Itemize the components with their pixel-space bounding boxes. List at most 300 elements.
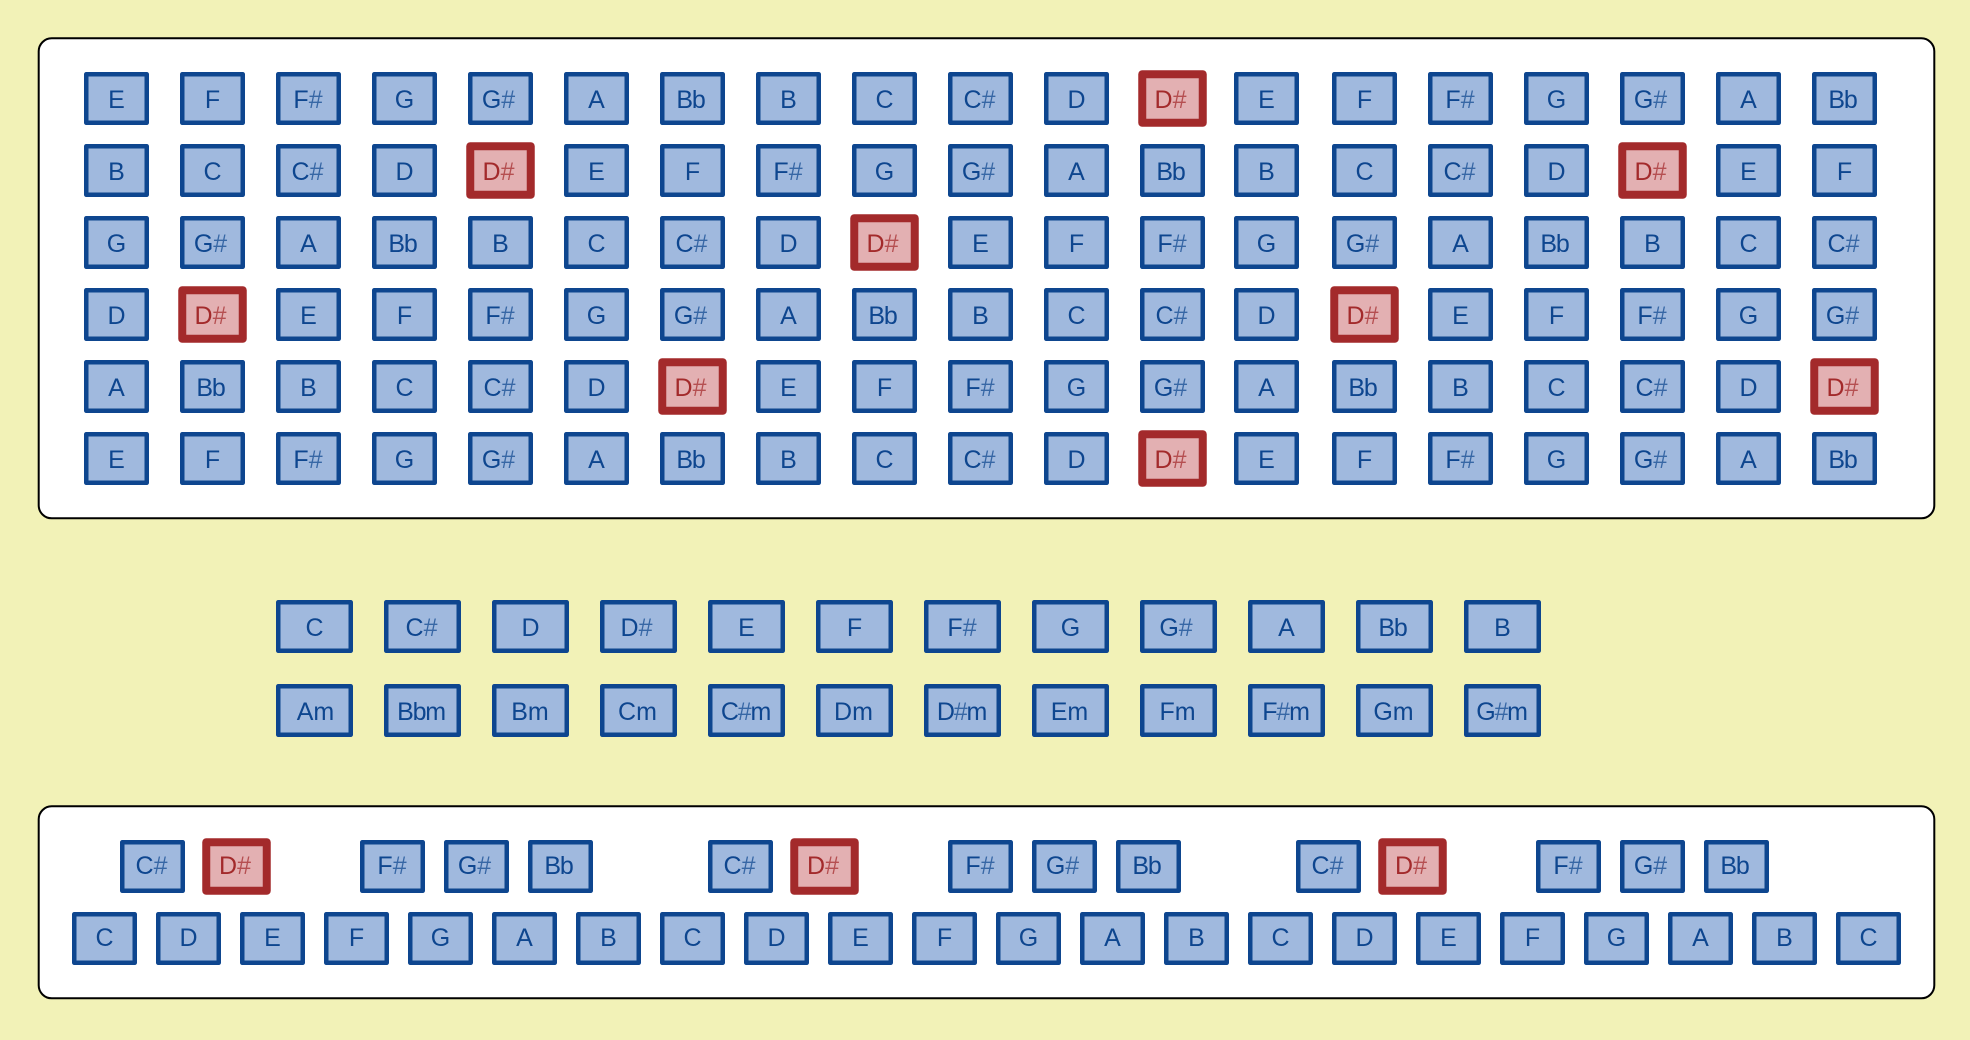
- key: E: E: [1740, 158, 1757, 186]
- key: Bb: [1814, 74, 1875, 123]
- key: D: D: [1257, 302, 1276, 330]
- key: F: F: [1357, 446, 1372, 474]
- highlighted key: D#: [794, 842, 855, 891]
- key: A: [1430, 218, 1491, 267]
- key: B: B: [1258, 158, 1275, 186]
- key: D: D: [1067, 446, 1086, 474]
- chord: Dm: [818, 686, 891, 735]
- highlighted key: D#: D#: [867, 230, 899, 258]
- key: G: [998, 914, 1059, 963]
- key: F#: [278, 434, 339, 483]
- key: E: [86, 434, 147, 483]
- key: E: E: [108, 86, 125, 114]
- key: D: [758, 218, 819, 267]
- key: F#: F#: [1445, 446, 1475, 474]
- key: F: [326, 914, 387, 963]
- key: G: G: [1067, 374, 1086, 402]
- key: E: [1236, 74, 1297, 123]
- key: C#: [950, 434, 1011, 483]
- key: G#: [470, 434, 531, 483]
- key: C#: C#: [1312, 852, 1344, 880]
- key: F#: [1430, 74, 1491, 123]
- key: C#: C#: [1636, 374, 1668, 402]
- key: G: G: [1019, 924, 1038, 952]
- chord: Dm: Dm: [834, 698, 873, 726]
- key: Bb: [1118, 842, 1179, 891]
- key: D: D: [1067, 86, 1086, 114]
- key: F: [662, 146, 723, 195]
- key: B: B: [972, 302, 989, 330]
- highlighted key: D#: [854, 218, 915, 267]
- key: C#: [1142, 290, 1203, 339]
- key: Bb: Bb: [1828, 446, 1857, 474]
- chord: D#m: D#m: [937, 698, 986, 726]
- key: A: [1082, 914, 1143, 963]
- key: A: A: [1452, 230, 1469, 258]
- chord: G: G: [1061, 614, 1080, 642]
- key: G: G: [1547, 446, 1566, 474]
- key: E: E: [1258, 446, 1275, 474]
- key: B: B: [1644, 230, 1661, 258]
- key: C#: [278, 146, 339, 195]
- key: A: [86, 362, 147, 411]
- key: D: D: [587, 374, 606, 402]
- key: C#: C#: [964, 446, 996, 474]
- chord: B: [1466, 602, 1539, 651]
- key: C#: [122, 842, 183, 891]
- key: Bb: Bb: [544, 852, 573, 880]
- key: E: [566, 146, 627, 195]
- key: F#: F#: [485, 302, 515, 330]
- grid row 6: [86, 434, 1875, 483]
- key: G: [1526, 434, 1587, 483]
- key: F: F: [937, 924, 952, 952]
- key: C: C: [683, 924, 702, 952]
- key: E: [758, 362, 819, 411]
- key: B: [86, 146, 147, 195]
- key: C: C: [95, 924, 114, 952]
- chord: Bbm: Bbm: [397, 698, 445, 726]
- chord: C: [278, 602, 351, 651]
- chord: D: [494, 602, 567, 651]
- key: C: C: [587, 230, 606, 258]
- key: C#: C#: [136, 852, 168, 880]
- grid row 5: [86, 362, 1875, 411]
- key: F#: F#: [1157, 230, 1187, 258]
- key: C: C: [875, 86, 894, 114]
- highlighted key: D#: D#: [1827, 374, 1859, 402]
- key: F: [1526, 290, 1587, 339]
- key: G#: G#: [482, 446, 515, 474]
- key: C#: [950, 74, 1011, 123]
- key: C: [1046, 290, 1107, 339]
- key: A: [566, 434, 627, 483]
- highlighted key: D#: D#: [483, 158, 515, 186]
- key: C: [854, 434, 915, 483]
- key: A: A: [300, 230, 317, 258]
- key: A: A: [1104, 924, 1121, 952]
- key: A: [1046, 146, 1107, 195]
- chord: D: D: [521, 614, 540, 642]
- key: E: E: [108, 446, 125, 474]
- key: G#: G#: [194, 230, 227, 258]
- chord: E: E: [738, 614, 755, 642]
- panel: chord selectors: [278, 602, 1539, 735]
- key: G: [1718, 290, 1779, 339]
- key: B: [470, 218, 531, 267]
- key: F#: F#: [293, 446, 323, 474]
- key: G#: [950, 146, 1011, 195]
- key: B: B: [1452, 374, 1469, 402]
- key: B: B: [1776, 924, 1793, 952]
- chord: Am: [278, 686, 351, 735]
- key: F#: F#: [965, 374, 995, 402]
- key: F: [1334, 74, 1395, 123]
- key: G: [1046, 362, 1107, 411]
- key: D: [158, 914, 219, 963]
- key: D: [1046, 434, 1107, 483]
- key: F#: [950, 362, 1011, 411]
- highlighted key: D#: [662, 362, 723, 411]
- key: G: G: [431, 924, 450, 952]
- key: B: [758, 74, 819, 123]
- key: E: E: [300, 302, 317, 330]
- key: D: D: [179, 924, 198, 952]
- key: G: G: [1607, 924, 1626, 952]
- key: F#: F#: [293, 86, 323, 114]
- highlighted key: D#: D#: [1347, 302, 1379, 330]
- key: F: F: [205, 446, 220, 474]
- key: G: G: [1547, 86, 1566, 114]
- panel: note grid: [39, 38, 1934, 518]
- key: B: [758, 434, 819, 483]
- key: F: [374, 290, 435, 339]
- key: B: [1166, 914, 1227, 963]
- key: Bb: [854, 290, 915, 339]
- key: F: F: [1549, 302, 1564, 330]
- key: A: A: [1068, 158, 1085, 186]
- key: C#: C#: [1828, 230, 1860, 258]
- chord: Em: [1034, 686, 1107, 735]
- key: G#: G#: [962, 158, 995, 186]
- key: A: A: [108, 374, 125, 402]
- key: Bb: [662, 74, 723, 123]
- key: Bb: Bb: [676, 446, 705, 474]
- key: F#: [758, 146, 819, 195]
- key: C#: C#: [484, 374, 516, 402]
- key: A: [758, 290, 819, 339]
- key: B: [950, 290, 1011, 339]
- key: F#: F#: [965, 852, 995, 880]
- chord: Bm: Bm: [511, 698, 549, 726]
- highlighted key: D#: [182, 290, 243, 339]
- chord: C: C: [305, 614, 324, 642]
- key: D: D: [1355, 924, 1374, 952]
- key: G: [854, 146, 915, 195]
- key: G#: G#: [458, 852, 491, 880]
- key: Bb: Bb: [1132, 852, 1161, 880]
- chord: G#: G#: [1159, 614, 1193, 642]
- key: C#: C#: [1156, 302, 1188, 330]
- chord: Bbm: [386, 686, 459, 735]
- key: D: D: [767, 924, 786, 952]
- key: C: C: [203, 158, 222, 186]
- key: G#: [446, 842, 507, 891]
- key: G: G: [107, 230, 126, 258]
- key: D: D: [779, 230, 798, 258]
- key: G#: G#: [1346, 230, 1379, 258]
- key: A: [1670, 914, 1731, 963]
- highlighted key: D#: [1334, 290, 1395, 339]
- key: B: [1754, 914, 1815, 963]
- key: A: A: [1740, 86, 1757, 114]
- chord: G#m: [1466, 686, 1539, 735]
- key: B: B: [300, 374, 317, 402]
- chord: Bb: Bb: [1378, 614, 1407, 642]
- key: A: A: [1740, 446, 1757, 474]
- key: Bb: Bb: [388, 230, 417, 258]
- key: F: F: [877, 374, 892, 402]
- key: D: [1236, 290, 1297, 339]
- grid row 1: [86, 74, 1875, 123]
- key: G#: [182, 218, 243, 267]
- key: C: [854, 74, 915, 123]
- chord: Cm: [602, 686, 675, 735]
- key: G#: [1622, 434, 1683, 483]
- key: B: B: [600, 924, 617, 952]
- key: G#: G#: [1826, 302, 1859, 330]
- chord: Fm: Fm: [1159, 698, 1196, 726]
- key: G#: G#: [1634, 852, 1667, 880]
- key: G#: G#: [1046, 852, 1079, 880]
- key: Bb: Bb: [676, 86, 705, 114]
- key: G: G: [395, 446, 414, 474]
- highlighted key: D#: D#: [807, 852, 839, 880]
- key: C: C: [1355, 158, 1374, 186]
- key: A: [1718, 434, 1779, 483]
- key: F#: [278, 74, 339, 123]
- key: G#: G#: [482, 86, 515, 114]
- chord: Bb: [1358, 602, 1431, 651]
- key: F: F: [1525, 924, 1540, 952]
- key: G: G: [587, 302, 606, 330]
- chord: Fm: [1142, 686, 1215, 735]
- key: C: C: [875, 446, 894, 474]
- key: F#: [470, 290, 531, 339]
- chord: Cm: Cm: [618, 698, 657, 726]
- key: E: [950, 218, 1011, 267]
- key: Bb: [530, 842, 591, 891]
- highlighted key: D#: D#: [1155, 86, 1187, 114]
- highlighted key: D#: [1142, 434, 1203, 483]
- key: F: [182, 74, 243, 123]
- key: Bb: Bb: [868, 302, 897, 330]
- key: F: [1502, 914, 1563, 963]
- key: B: [1622, 218, 1683, 267]
- key: G#: [1622, 842, 1683, 891]
- key: C: [74, 914, 135, 963]
- key: C: C: [1739, 230, 1758, 258]
- key: Bb: [1334, 362, 1395, 411]
- key: B: [1430, 362, 1491, 411]
- key: E: E: [1258, 86, 1275, 114]
- key: Bb: Bb: [1348, 374, 1377, 402]
- key: E: [86, 74, 147, 123]
- chord: B: B: [1494, 614, 1511, 642]
- key: G: [1236, 218, 1297, 267]
- highlighted key: D#: D#: [219, 852, 251, 880]
- key: E: E: [852, 924, 869, 952]
- key: C: [1526, 362, 1587, 411]
- chord: F#: [926, 602, 999, 651]
- key: B: B: [780, 86, 797, 114]
- key: F: [1046, 218, 1107, 267]
- chord: C#: C#: [406, 614, 438, 642]
- key: F#: F#: [1445, 86, 1475, 114]
- key: F#: [1538, 842, 1599, 891]
- key: D: [86, 290, 147, 339]
- key: F#: F#: [1553, 852, 1583, 880]
- key: C: C: [395, 374, 414, 402]
- chord: C#m: C#m: [721, 698, 770, 726]
- key: C#: C#: [292, 158, 324, 186]
- grid row 2: [86, 146, 1875, 195]
- key: A: [494, 914, 555, 963]
- key: G#: [1622, 74, 1683, 123]
- key: Bb: Bb: [1828, 86, 1857, 114]
- key: C#: [470, 362, 531, 411]
- key: A: [1718, 74, 1779, 123]
- keyboard panel background: [39, 806, 1934, 998]
- key: F: [914, 914, 975, 963]
- key: C#: [1298, 842, 1359, 891]
- key: C: [182, 146, 243, 195]
- highlighted key: D#: [470, 146, 531, 195]
- key: G: [1586, 914, 1647, 963]
- highlighted key: D#: [1142, 74, 1203, 123]
- key: F#: F#: [773, 158, 803, 186]
- minor chord row: [278, 686, 1539, 735]
- key: C: [374, 362, 435, 411]
- chord: F: [818, 602, 891, 651]
- key: A: A: [1258, 374, 1275, 402]
- key: C#: [1622, 362, 1683, 411]
- key: F#: F#: [1637, 302, 1667, 330]
- key: F: [854, 362, 915, 411]
- key: C: [662, 914, 723, 963]
- key: D: [1526, 146, 1587, 195]
- key: C: [1250, 914, 1311, 963]
- key: F: F: [1357, 86, 1372, 114]
- key: G: [374, 434, 435, 483]
- key: E: [1236, 434, 1297, 483]
- key: D: D: [395, 158, 414, 186]
- highlighted key: D#: D#: [1635, 158, 1667, 186]
- key: G#: [470, 74, 531, 123]
- key: G#: G#: [1154, 374, 1187, 402]
- chord: F#m: [1250, 686, 1323, 735]
- key: G#: [1814, 290, 1875, 339]
- key: F: F: [205, 86, 220, 114]
- key: G: G: [1739, 302, 1758, 330]
- key: Bb: [1526, 218, 1587, 267]
- key: A: A: [516, 924, 533, 952]
- key: G: G: [875, 158, 894, 186]
- highlighted key: D#: [1622, 146, 1683, 195]
- grid row 4: [86, 290, 1875, 339]
- key: C: [1838, 914, 1899, 963]
- key: F#: [1622, 290, 1683, 339]
- key: F#: [1430, 434, 1491, 483]
- key: E: E: [780, 374, 797, 402]
- key: E: [830, 914, 891, 963]
- key: E: [1430, 290, 1491, 339]
- chord: D#: D#: [621, 614, 653, 642]
- chord: Bm: [494, 686, 567, 735]
- key: Bb: [1706, 842, 1767, 891]
- chord: Gm: [1358, 686, 1431, 735]
- key: G: [410, 914, 471, 963]
- key: C: [1334, 146, 1395, 195]
- key: F: [1334, 434, 1395, 483]
- key: G#: [1034, 842, 1095, 891]
- key: C#: C#: [724, 852, 756, 880]
- key: B: [1236, 146, 1297, 195]
- key: G#: G#: [674, 302, 707, 330]
- key: G#: G#: [1634, 86, 1667, 114]
- key: D: D: [1547, 158, 1566, 186]
- chord: Em: Em: [1051, 698, 1088, 726]
- key: G: [1526, 74, 1587, 123]
- black keys row: [122, 842, 1767, 891]
- key: C#: [1814, 218, 1875, 267]
- chord: D#: [602, 602, 675, 651]
- key: Bb: Bb: [1540, 230, 1569, 258]
- key: Bb: [1142, 146, 1203, 195]
- key: A: A: [780, 302, 797, 330]
- key: A: A: [1692, 924, 1709, 952]
- key: E: [1718, 146, 1779, 195]
- key: Bb: Bb: [1156, 158, 1185, 186]
- key: C#: [1430, 146, 1491, 195]
- key: C: C: [1547, 374, 1566, 402]
- highlighted key: D#: D#: [1155, 446, 1187, 474]
- key: Bb: [1814, 434, 1875, 483]
- key: E: E: [588, 158, 605, 186]
- key: A: [566, 74, 627, 123]
- key: Bb: [662, 434, 723, 483]
- key: C: C: [1271, 924, 1290, 952]
- key: C: C: [1067, 302, 1086, 330]
- key: E: [278, 290, 339, 339]
- key: G: G: [1257, 230, 1276, 258]
- chord: Gm: Gm: [1373, 698, 1414, 726]
- key: F: F: [685, 158, 700, 186]
- key: C: [1718, 218, 1779, 267]
- key: B: [278, 362, 339, 411]
- key: B: B: [108, 158, 125, 186]
- key: F: F: [349, 924, 364, 952]
- key: E: E: [972, 230, 989, 258]
- key: G: G: [395, 86, 414, 114]
- key: D: [746, 914, 807, 963]
- chord: C#: [386, 602, 459, 651]
- key: G#: [1334, 218, 1395, 267]
- key: D: [1718, 362, 1779, 411]
- key: B: [578, 914, 639, 963]
- chord: Am: Am: [297, 698, 334, 726]
- key: A: [1236, 362, 1297, 411]
